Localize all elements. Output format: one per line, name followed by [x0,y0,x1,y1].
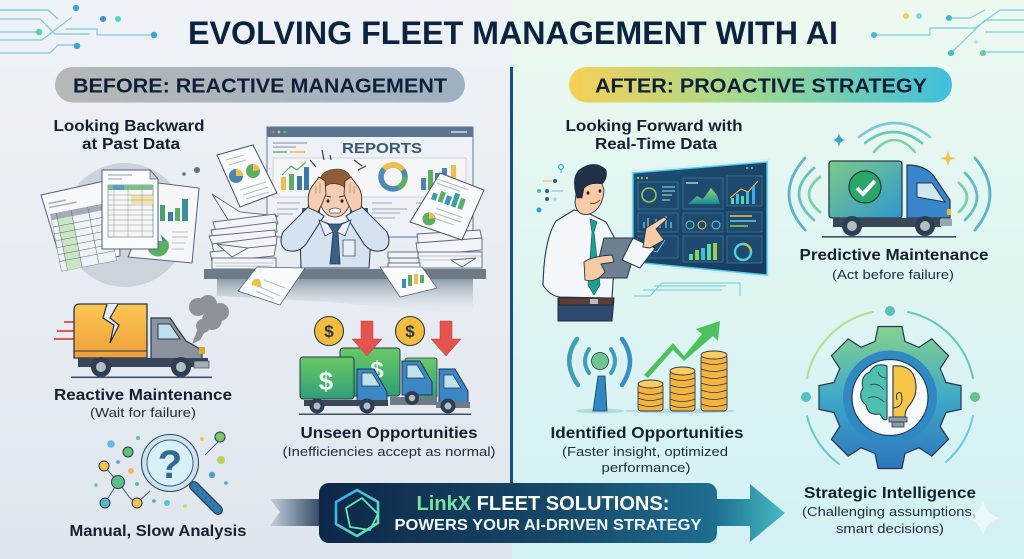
text: reactive maintenance: (Wait for failure) [90,405,196,420]
icon: green trucks with falling money: $ [405,322,415,341]
paper stack left [209,194,278,269]
text: real-time data: Real-Time Data [595,136,717,153]
text: unseen opportunities: Unseen Opportunities [300,425,478,442]
text: predictive maintenance: Predictive Maintenance [800,247,989,264]
paper stack right [388,230,482,268]
decoration: circuit lines top left [0,5,157,53]
text: unseen opportunities: (Inefficiencies accept as normal) [282,444,496,459]
reports screen: REPORTS [342,140,422,157]
icon: magnifying glass with data nodes: ? [158,443,182,487]
heading pill: before: BEFORE: REACTIVE MANAGEMENT [73,76,447,98]
background: before side [0,0,512,559]
analyst figure [543,164,667,321]
text: strategic intelligence: smart decisions) [836,521,944,536]
text: looking forward: Looking Forward with [566,118,742,135]
text: identified opportunities [550,425,744,475]
text: predictive maintenance [800,247,989,282]
icon: predictive maintenance truck [789,123,990,238]
decoration: sparkle [966,500,1000,536]
text: identified opportunities: performance) [602,460,690,475]
text: reactive maintenance [54,387,232,420]
small data dots [536,165,563,212]
desk [204,267,486,315]
title: EVOLVING FLEET MANAGEMENT WITH AI [188,15,838,51]
text: looking backward: Looking Backward [54,118,204,135]
icon: signal tower with coin stacks and growth arrow [569,321,735,414]
text: at past data: at Past Data [82,136,180,153]
text: identified opportunities: (Faster insight, optimized [562,444,728,459]
text: manual slow analysis: Manual, Slow Analysis [70,523,246,540]
stressed manager [281,150,389,268]
heading pill: before [55,67,465,102]
floating paper right [410,173,484,240]
banner: LinkX Fleet Solutions: LinkX FLEET SOLUTIONS: [416,493,670,515]
illustration: past data documents [41,163,200,287]
text: strategic intelligence: (Challenging assumptions, [802,504,976,519]
icon: green trucks with falling money [299,316,471,415]
icon: gear with brain and lightbulb [801,306,980,468]
floating paper left [217,145,277,207]
text: strategic intelligence [802,485,976,536]
text: unseen opportunities [282,425,496,459]
icon: green trucks with falling money: $ [324,322,334,341]
heading pill: after [569,67,952,102]
banner: LinkX Fleet Solutions [270,483,785,543]
text: predictive maintenance: (Act before failure) [832,267,954,282]
icon: broken orange truck [54,295,229,378]
icon: LinkX hexagon logo [336,490,378,536]
decoration: circuit lines top right [871,10,1024,56]
text: reactive maintenance: Reactive Maintenance [54,387,232,404]
background: after side [512,0,1024,559]
text: identified opportunities: Identified Opportunities [550,425,744,442]
text: strategic intelligence: Strategic Intelligence [804,485,976,502]
illustration: analyst with real-time dashboard [536,162,767,321]
icon: green trucks with falling money: $ [319,366,334,396]
icon: magnifying glass with data nodes [94,432,228,510]
reports screen [267,127,473,237]
banner: LinkX Fleet Solutions: POWERS YOUR AI-DRIVEN STRATEGY [394,517,702,534]
dashboard screen [633,162,767,275]
illustration: reports screen with stressed manager [204,127,486,315]
circuit under dashboard [634,283,740,296]
icon: green trucks with falling money: $ [370,357,384,384]
panel divider [510,67,513,484]
heading pill: after: AFTER: PROACTIVE STRATEGY [595,76,928,98]
